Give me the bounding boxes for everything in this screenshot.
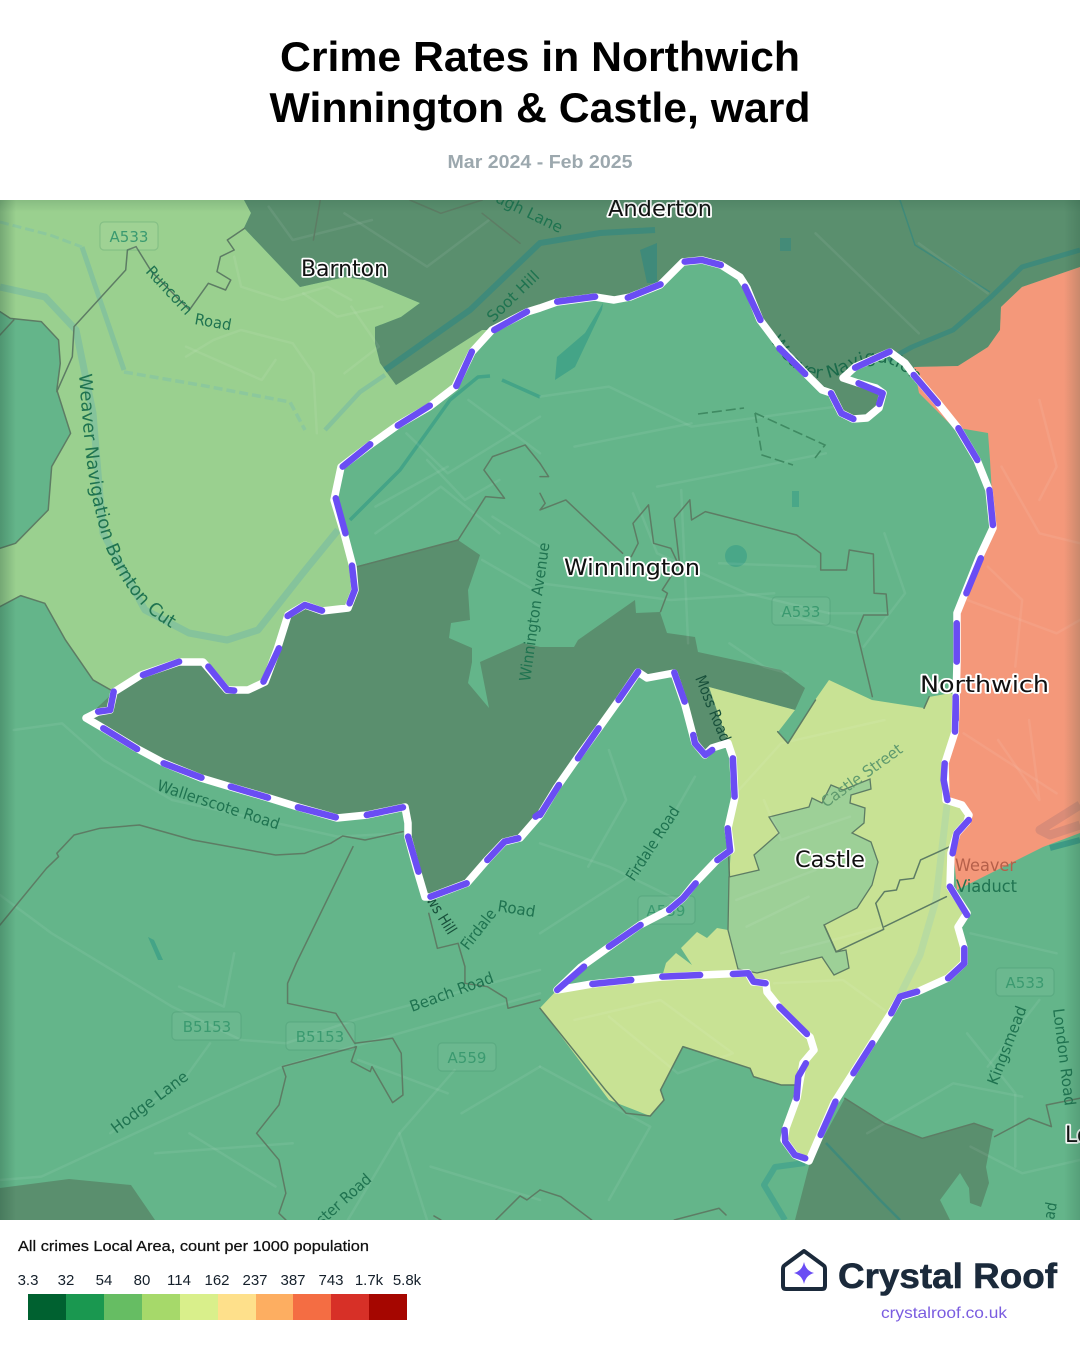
area boundaries, top right quadrant	[540, 463, 929, 708]
shield: B5153 centre: B5153	[296, 1028, 344, 1046]
area: Northwich salmon	[914, 267, 1080, 890]
pond dark band	[780, 238, 791, 251]
legend scale labels: 5.8k	[393, 1272, 422, 1289]
dashes, bottom right quadrant	[540, 700, 969, 1158]
river oxbow south	[764, 1163, 805, 1220]
dark band over Northwich	[1040, 805, 1080, 835]
label: Runcorn Road	[142, 262, 233, 334]
ward boundary: purple dashes	[98, 260, 993, 1158]
label: Runcorn Road: Runcorn	[142, 262, 196, 319]
river channels north of Barnton	[82, 247, 124, 370]
area: dark green south	[795, 1098, 993, 1220]
area boundaries, bottom right quadrant	[540, 700, 1080, 1220]
map edge vignette	[0, 200, 1080, 1220]
river: Weaver Navigation Barnton Cut	[0, 287, 338, 640]
label: Wallerscote Road: Wallerscote Road	[155, 777, 282, 833]
road number shields	[100, 222, 1054, 1071]
dashed channel Barnton	[124, 372, 305, 430]
legend colour bar	[28, 1294, 407, 1320]
place: Northwich: Northwich	[920, 673, 1049, 698]
road network, top left quadrant	[186, 207, 540, 593]
area: dark green north band	[244, 200, 1080, 419]
brand name: Crystal Roof	[838, 1257, 1057, 1296]
icon: Crystal Roof house logo	[783, 1251, 825, 1289]
second canal Winnington	[502, 380, 540, 397]
map	[0, 200, 1080, 1220]
place: Winnington: Winnington	[564, 556, 700, 581]
shield: B5153 west: B5153	[183, 1018, 231, 1036]
rail sidings Winnington	[698, 408, 825, 465]
river east	[1050, 840, 1080, 848]
shield: B5153 centre	[286, 1022, 355, 1050]
lock basin Anderton	[640, 243, 657, 283]
road network, top right quadrant	[540, 233, 1080, 673]
legend title: All crimes Local Area, count per 1000 population	[18, 1238, 369, 1255]
dashes, bottom left quadrant	[103, 728, 540, 897]
legend scale labels: 114	[167, 1272, 191, 1289]
shield: A559 north	[638, 896, 695, 924]
road labels	[79, 200, 1079, 1269]
label: Winnington Avenue: Winnington Avenue	[516, 541, 553, 683]
area: Castle yellow green	[540, 680, 969, 1161]
place: Barnton: Barnton	[301, 257, 388, 282]
legend scale labels: 1.7k	[355, 1272, 384, 1289]
dashed channel north-west	[0, 222, 82, 247]
label: Shaws Hill: ws Hill	[423, 893, 460, 938]
ward boundary: white line	[86, 260, 993, 1161]
rail corridor at Castle	[900, 805, 947, 995]
label: Firdale Road south: Firdale	[457, 905, 500, 953]
label: Weaver Viaduct	[955, 856, 1017, 897]
label: Weaver Navigation east: Weaver Navigation	[772, 334, 920, 381]
label: Firdale Road north: Firdale Road	[622, 803, 684, 884]
small ponds	[792, 491, 799, 507]
area: dark green south-west	[0, 1179, 155, 1220]
canal in Winnington	[350, 376, 490, 520]
river south	[826, 1143, 900, 1220]
shield: A533 east: A533	[1006, 974, 1044, 992]
legend scale labels: 32	[58, 1272, 74, 1289]
label: Firdale Road south: Road	[496, 897, 537, 921]
shield: A533 Winnington	[772, 597, 830, 625]
base area: medium green	[0, 200, 1080, 1220]
header: title and date range	[270, 33, 810, 172]
label: Hodge Lane: Hodge Lane	[108, 1067, 192, 1137]
label: Weaver Navigation Barnton Cut: Weaver Navigation Barnton Cut	[79, 374, 176, 628]
brand url: crystalroof.co.uk	[881, 1305, 1008, 1322]
legend scale labels: 237	[242, 1272, 268, 1289]
label: Weaver Viaduct: Weaver	[955, 856, 1016, 876]
area: dark green Winnington south	[86, 540, 805, 897]
legend scale labels	[18, 1272, 422, 1289]
date range: Mar 2024 - Feb 2025	[448, 152, 632, 172]
title	[270, 33, 810, 131]
thin channel top right	[900, 200, 990, 292]
road network, bottom right quadrant	[540, 720, 1080, 1200]
shield: A559 south	[438, 1043, 496, 1071]
area: Barnton light green	[0, 200, 492, 692]
label: Beach Road: Beach Road	[407, 969, 496, 1016]
label: Moss Road: Moss Road	[691, 673, 734, 744]
title: Crime Rates in Northwich	[280, 33, 800, 80]
river top right	[888, 250, 1080, 360]
place labels	[301, 197, 1080, 1148]
legend scale labels: 3.3	[18, 1272, 38, 1289]
road network, bottom left quadrant	[0, 723, 540, 1220]
shield: A559 south: A559	[448, 1049, 486, 1067]
label: Weaver Viaduct: Viaduct	[956, 877, 1017, 897]
lake north Winnington	[555, 303, 603, 380]
area boundaries, top left quadrant	[0, 200, 540, 692]
legend scale labels: 162	[204, 1272, 230, 1289]
pond Winnington	[725, 545, 747, 567]
upper canal Barnton	[325, 375, 385, 430]
pond south west	[148, 937, 163, 960]
place: Castle: Castle	[795, 848, 865, 873]
legend scale labels: 387	[280, 1272, 306, 1289]
footer: legend and brand	[18, 1238, 1058, 1322]
shield: A533 east	[996, 968, 1054, 996]
label: Runcorn Road: Road	[193, 310, 233, 334]
dashes, top right quadrant	[557, 260, 993, 720]
area: Castle inner light green	[728, 779, 878, 975]
water and rail overlays	[0, 200, 1080, 1220]
shield: B5153 west	[172, 1012, 241, 1040]
shield: A533 Winnington: A533	[782, 603, 820, 621]
label: London Road: London Road	[1049, 1007, 1079, 1107]
label: Firdale Road south	[457, 897, 537, 953]
label: Castle Street: Castle Street	[818, 740, 906, 811]
shield: A533 Barnton: A533	[110, 228, 148, 246]
canal on dark band	[385, 230, 655, 370]
label: Kingsmead: Kingsmead	[984, 1003, 1030, 1087]
label: Soot Hill: Soot Hill	[483, 267, 543, 326]
area boundaries, bottom left quadrant	[0, 825, 540, 1220]
legend scale labels: 80	[134, 1272, 150, 1289]
legend scale labels: 54	[96, 1272, 112, 1289]
pocket on ward boundary	[833, 378, 883, 419]
dashes, top left quadrant	[98, 312, 527, 712]
shield: A533 Barnton	[100, 222, 158, 250]
shield: A559 north: A559	[647, 902, 685, 920]
title: Winnington & Castle, ward	[270, 84, 810, 131]
legend scale labels: 743	[318, 1272, 344, 1289]
